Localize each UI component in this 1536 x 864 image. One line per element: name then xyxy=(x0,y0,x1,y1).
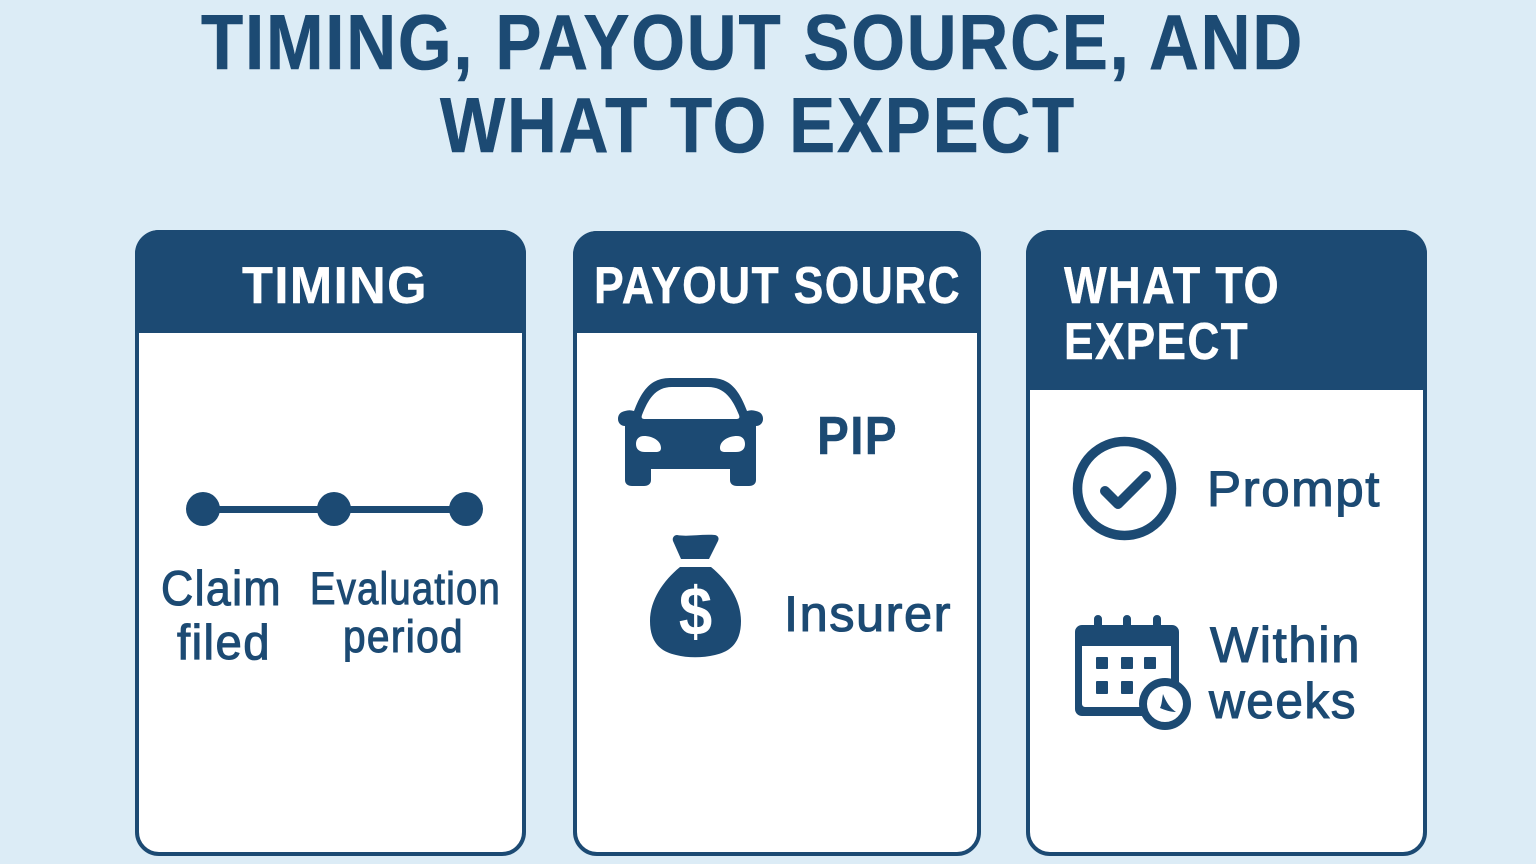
label: claim filed: Claim xyxy=(161,562,282,616)
label: prompt: Prompt xyxy=(1207,461,1381,517)
title: TIMING, PAYOUT SOURCE, AND xyxy=(201,0,1304,86)
heading: timing: TIMING xyxy=(242,257,428,315)
label: evaluation period: period xyxy=(343,611,464,662)
label: evaluation period xyxy=(310,563,501,662)
label: within weeks: Within xyxy=(1210,617,1361,673)
icon: calendar with clock xyxy=(1075,615,1187,726)
icon: money bag xyxy=(650,535,741,657)
label: insurer: Insurer xyxy=(784,586,952,642)
heading: what to expect: WHAT TO xyxy=(1064,257,1280,315)
label: pip: PIP xyxy=(817,406,898,466)
icon: car xyxy=(618,378,763,486)
label: claim filed: filed xyxy=(177,616,271,670)
icon: money bag: $ xyxy=(679,572,712,650)
label: within weeks xyxy=(1208,617,1361,729)
heading: payout source xyxy=(573,231,981,333)
heading: payout source: PAYOUT SOURC xyxy=(594,257,961,315)
title: WHAT TO EXPECT xyxy=(440,81,1076,169)
heading: what to expect xyxy=(1026,230,1427,390)
panel: what to expect xyxy=(1026,230,1427,854)
timeline chart xyxy=(186,492,483,526)
heading: timing xyxy=(135,230,526,333)
panel: timing xyxy=(135,230,526,854)
heading: what to expect: EXPECT xyxy=(1064,313,1249,371)
panel: payout source xyxy=(573,231,981,854)
label: claim filed xyxy=(161,562,282,670)
label: evaluation period: Evaluation xyxy=(310,563,501,614)
label: within weeks: weeks xyxy=(1208,673,1357,729)
title xyxy=(201,0,1304,169)
icon: check circle xyxy=(1078,442,1172,536)
